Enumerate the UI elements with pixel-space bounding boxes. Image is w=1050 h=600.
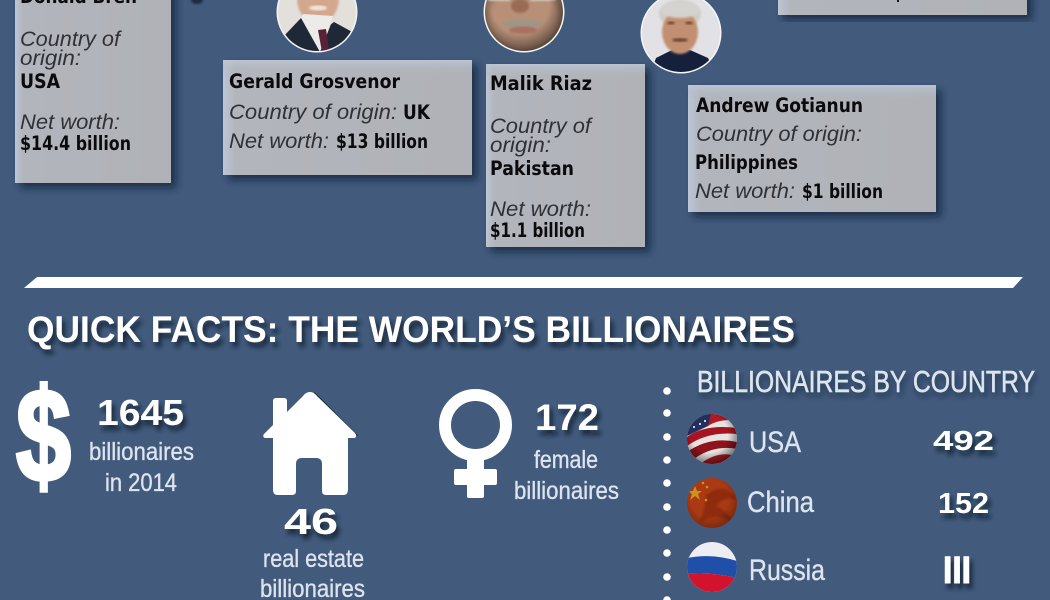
net worth value: $1 billion (802, 180, 883, 203)
country name: USA (749, 426, 801, 459)
label line one: real estate (263, 545, 364, 573)
fact: 172 female billionaires (445, 395, 619, 505)
country of origin: Country of origin: (229, 101, 397, 124)
name: Gerald Grosvenor: Gerald Grosvenor (229, 70, 400, 93)
portrait: Gerald Grosvenor (276, 0, 358, 52)
fact: 46 real estate billionaires (260, 392, 365, 600)
net worth label: Net worth: (229, 130, 329, 153)
country of origin: Country of origin: (696, 123, 862, 146)
name: Andrew Gotianun: Andrew Gotianun (696, 94, 863, 117)
portrait: Malik Riaz (484, 0, 564, 52)
count: 492 (933, 425, 994, 456)
net worth label: Net worth: (695, 180, 795, 203)
country value: USA (20, 70, 60, 93)
number: 46 (284, 501, 338, 542)
country name: China (747, 486, 814, 519)
label line two: billionaires (514, 477, 619, 505)
row: Russia (687, 542, 971, 592)
country label continued: origin: (20, 47, 81, 70)
heading: QUICK FACTS: THE WORLD’S BILLIONAIRES (27, 309, 795, 350)
row: China (687, 478, 989, 528)
net worth value: $13 billion (336, 130, 428, 153)
country value: Pakistan (490, 157, 574, 180)
panel: Malik Riaz (486, 64, 645, 247)
divider (24, 277, 1023, 288)
dotted vertical separator (663, 387, 671, 600)
count: 152 (938, 488, 989, 520)
country value: Philippines (695, 151, 798, 174)
icon: Russia flag (687, 542, 737, 592)
panel: Donald Bren (15, 0, 171, 183)
row: USA (687, 414, 994, 464)
number: 172 (535, 397, 599, 438)
country label continued: origin: (490, 134, 551, 157)
country label: Country of (20, 28, 122, 51)
number: 1645 (97, 392, 184, 433)
net worth value: $14.4 billion (20, 132, 131, 155)
label line two: in 2014 (105, 469, 177, 497)
count: III (943, 550, 971, 592)
country name: Russia (749, 554, 825, 587)
label line one: female (534, 446, 598, 474)
panel: Gerald Grosvenor (223, 60, 472, 175)
country label: Country of (490, 115, 593, 138)
fact: 1645 billionaires (16, 362, 194, 509)
portrait: Andrew Gotianun (640, 0, 722, 74)
billionaires by country (687, 364, 1035, 592)
panel: cropped top right card (778, 0, 1027, 15)
label line one: billionaires (89, 438, 194, 466)
name: Malik Riaz: Malik Riaz (490, 72, 592, 95)
shadow remnant at top edge (191, 0, 203, 4)
icon: China flag (687, 478, 737, 528)
net worth label: Net worth: (20, 111, 120, 134)
net worth value: $1.1 billion (490, 219, 585, 242)
country value: UK (403, 101, 431, 124)
icon: female symbol (445, 395, 506, 498)
icon: house (263, 392, 357, 495)
net worth label: Net worth: (490, 198, 591, 221)
panel: Andrew Gotianun (688, 85, 936, 212)
icon: dollar sign: $ (16, 362, 71, 509)
icon: USA flag (687, 414, 737, 464)
